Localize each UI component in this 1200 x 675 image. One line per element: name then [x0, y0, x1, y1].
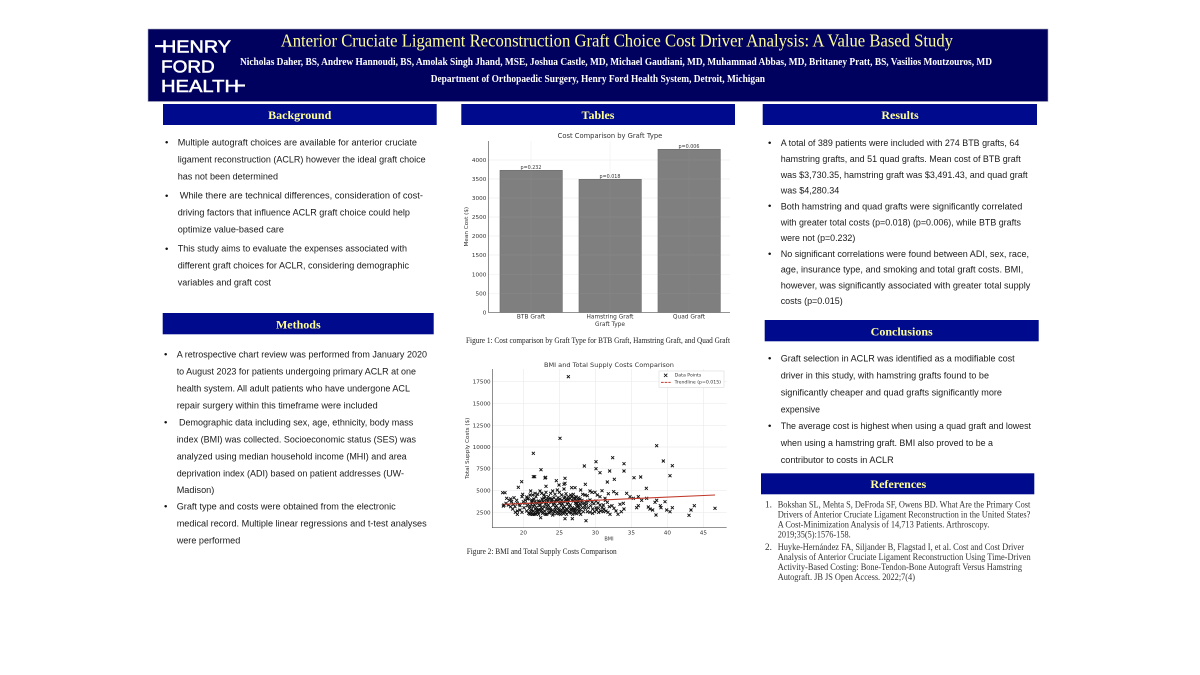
background bullet points: optimize value-based care: [178, 225, 284, 236]
panel: methods: [163, 313, 434, 547]
methods bullet points: analyzed using median household income (MHI) and area: [177, 451, 407, 462]
bar chart: cost comparison by graft type: [464, 132, 730, 328]
bar chart: cost comparison by graft type: 2000: [472, 234, 487, 240]
background bullet points: ligament reconstruction (ACLR) however the ideal graft choice: [178, 155, 426, 166]
results bullet points: was $4,280.34: [780, 186, 840, 197]
panel: results: [763, 104, 1037, 307]
methods bullet points: Madison): [177, 485, 214, 496]
logo: Henry Ford Health: FORD: [161, 56, 215, 76]
background bullet points: has not been determined: [178, 172, 278, 183]
bar chart: cost comparison by graft type: p=0.232: [521, 165, 541, 171]
heading: methods: Methods: [276, 317, 321, 331]
scatter plot: BMI and total supply costs: [465, 362, 727, 543]
results bullet points: •: [768, 138, 771, 149]
results bullet points: •: [768, 201, 771, 212]
conclusions bullet points: expensive: [781, 405, 820, 416]
conclusions bullet points: driver in this study, with hamstring grafts found to be: [781, 371, 989, 382]
results bullet points: A total of 389 patients were included with 274 BTB grafts, 64: [781, 138, 1020, 149]
results bullet points: with greater total costs (p=0.018) (p=0.006), while BTB grafts: [780, 217, 1021, 228]
scatter plot: BMI and total supply costs: 40: [664, 530, 671, 536]
scatter plot: BMI and total supply costs: BMI and Total Supply Costs Comparison: [544, 362, 674, 369]
methods bullet points: index (BMI) was collected. Socioeconomic status (SES) was: [177, 435, 416, 446]
results bullet points: Both hamstring and quad grafts were significantly correlated: [781, 201, 1022, 212]
bar chart: cost comparison by graft type: Cost Comparison by Graft Type: [558, 132, 662, 140]
reference list: A Cost-Minimization Analysis of 14,713 Patients. Arthroscopy.: [778, 520, 989, 530]
conclusions bullet points: Graft selection in ACLR was identified as a modifiable cost: [781, 353, 1015, 364]
results bullet points: •: [768, 249, 771, 260]
methods bullet points: Demographic data including sex, age, ethnicity, body mass: [179, 417, 413, 428]
scatter plot: BMI and total supply costs: 2500: [476, 510, 491, 516]
figure 1 caption: Figure 1: Cost comparison by Graft Type for BTB Graft, Hamstring Graft, and Quad Graft: [466, 336, 731, 345]
panel: references: [761, 473, 1034, 582]
heading: methods: [163, 313, 434, 334]
heading: background: [163, 104, 437, 125]
panel: tables: [461, 104, 735, 556]
heading: references: References: [870, 477, 927, 491]
department: Department of Orthopaedic Surgery, Henry Ford Health System, Detroit, Michigan: [431, 74, 765, 85]
conclusions bullet points: contributor to costs in ACLR: [781, 455, 894, 466]
reference list: Analysis of Anterior Cruciate Ligament Reconstruction Using Time-Driven: [778, 552, 1031, 562]
heading: background: Background: [268, 108, 332, 122]
background bullet points: different graft choices for ACLR, considering demographic: [178, 261, 409, 272]
panel: conclusions: [765, 320, 1039, 466]
scatter plot: BMI and total supply costs: 10000: [473, 445, 491, 451]
bar chart: cost comparison by graft type: 3500: [472, 177, 487, 183]
scatter plot: BMI and total supply costs: 35: [628, 530, 635, 536]
reference list: Activity-Based Costing: Bone-Tendon-Bone Autograft Versus Hamstring: [778, 562, 1022, 572]
reference list: 2.: [765, 542, 772, 552]
scatter plot: BMI and total supply costs: 15000: [473, 401, 491, 407]
figure 2 caption: Figure 2: BMI and Total Supply Costs Comparison: [467, 547, 617, 556]
background bullet points: •: [165, 244, 168, 255]
results bullet points: [768, 138, 1030, 307]
reference list: Bokshan SL, Mehta S, DeFroda SF, Owens BD. What Are the Primary Cost: [778, 500, 1031, 510]
heading: references: [761, 473, 1034, 494]
logo: Henry Ford Health: HEALTH: [161, 76, 239, 96]
results bullet points: costs (p=0.015): [781, 296, 843, 307]
scatter plot: BMI and total supply costs: 30: [592, 530, 599, 536]
background bullet points: [165, 138, 426, 289]
results bullet points: were not (p=0.232): [780, 233, 855, 244]
background bullet points: •: [165, 191, 168, 202]
reference list: 1.: [765, 500, 772, 510]
reference list: Huyke-Hernández FA, Siljander B, Flagstad I, et al. Cost and Cost Driver: [778, 542, 1024, 552]
background bullet points: Multiple autograft choices are available for anterior cruciate: [178, 138, 417, 149]
title: Anterior Cruciate Ligament Reconstruction Graft Choice Cost Driver Analysis: A Value Based Study: [281, 31, 953, 51]
methods bullet points: deprivation index (ADI) based on patient addresses (UW-: [177, 468, 404, 479]
panel: background: [163, 104, 437, 289]
reference list: Autograft. JB JS Open Access. 2022;7(4): [778, 572, 915, 582]
heading: results: Results: [881, 108, 919, 122]
conclusions bullet points: •: [768, 421, 771, 432]
logo: Henry Ford Health: HENRY: [162, 37, 231, 57]
bar chart: cost comparison by graft type: 500: [476, 291, 487, 297]
heading: tables: Tables: [582, 108, 615, 122]
bar chart: cost comparison by graft type: p=0.006: [679, 144, 699, 150]
bar chart: cost comparison by graft type: 4000: [472, 158, 487, 164]
results bullet points: was $3,730.35, hamstring graft was $3,491.43, and quad graft: [780, 170, 1028, 181]
scatter plot: BMI and total supply costs: BMI: [604, 537, 614, 543]
conclusions bullet points: when using a hamstring graft. BMI also proved to be a: [780, 438, 994, 449]
methods bullet points: •: [164, 417, 167, 428]
results bullet points: however, was significantly associated with greater total supply: [781, 280, 1030, 291]
logo: Henry Ford Health: [155, 37, 245, 96]
bar chart: cost comparison by graft type: 2500: [472, 215, 487, 221]
heading: conclusions: [765, 320, 1039, 341]
scatter plot: BMI and total supply costs: 5000: [476, 489, 491, 495]
scatter plot: BMI and total supply costs: 7500: [476, 467, 491, 473]
scatter plot: BMI and total supply costs: 12500: [473, 423, 491, 429]
bar chart: cost comparison by graft type: p=0.018: [600, 174, 620, 180]
bar chart: cost comparison by graft type: 1000: [472, 272, 487, 278]
heading: results: [763, 104, 1037, 125]
results bullet points: No significant correlations were found between ADI, sex, race,: [781, 249, 1029, 260]
methods bullet points: medical record. Multiple linear regressions and t-test analyses: [177, 519, 427, 530]
scatter plot: BMI and total supply costs: Total Supply Costs ($): [465, 418, 471, 480]
scatter plot: BMI and total supply costs: 45: [700, 530, 707, 536]
results bullet points: hamstring grafts, and 51 quad grafts. Mean cost of BTB graft: [781, 154, 1021, 165]
heading: tables: [461, 104, 735, 125]
methods bullet points: were performed: [176, 536, 240, 547]
background bullet points: variables and graft cost: [178, 278, 271, 289]
legend: Trendline (p=0.015): [674, 380, 721, 386]
bar chart: cost comparison by graft type: Mean Cost ($): [464, 207, 470, 246]
bar chart: cost comparison by graft type: Graft Type: [595, 322, 625, 328]
scatter plot: BMI and total supply costs: 25: [556, 530, 563, 536]
methods bullet points: •: [164, 501, 167, 512]
scatter plot: BMI and total supply costs: 20: [520, 530, 527, 536]
background bullet points: driving factors that influence ACLR graft choice could help: [178, 208, 410, 219]
reference list: Drivers of Anterior Cruciate Ligament Reconstruction in the United States?: [778, 510, 1030, 520]
conclusions bullet points: The average cost is highest when using a quad graft and lowest: [781, 421, 1031, 432]
authors: Nicholas Daher, BS, Andrew Hannoudi, BS, Amolak Singh Jhand, MSE, Joshua Castle, MD, Michael Gaudiani, MD, Muhammad Abbas, MD, Brittaney Pratt, BS, Vasilios Moutzouros, MD: [240, 57, 992, 68]
legend: Data Points: [675, 373, 702, 379]
reference list: 2019;35(5):1576-158.: [778, 529, 851, 539]
bar chart: cost comparison by graft type: Quad Graft: [673, 315, 706, 321]
methods bullet points: •: [164, 350, 167, 361]
bar chart: cost comparison by graft type: BTB Graft: [517, 315, 546, 321]
methods bullet points: health system. All adult patients who have undergone ACL: [177, 384, 411, 395]
legend: [659, 371, 724, 387]
methods bullet points: repair surgery within this timeframe were included: [177, 401, 378, 412]
reference list: [765, 500, 1031, 582]
conclusions bullet points: •: [768, 353, 771, 364]
background bullet points: This study aims to evaluate the expenses associated with: [178, 244, 407, 255]
scatter plot: BMI and total supply costs: 17500: [473, 380, 491, 386]
methods bullet points: [164, 350, 427, 547]
bar chart: cost comparison by graft type: 1500: [472, 253, 487, 259]
methods bullet points: Graft type and costs were obtained from the electronic: [177, 501, 396, 512]
background bullet points: While there are technical differences, consideration of cost-: [180, 191, 423, 202]
background bullet points: •: [165, 138, 168, 149]
bar chart: cost comparison by graft type: 3000: [472, 196, 487, 202]
conclusions bullet points: [768, 353, 1031, 466]
results bullet points: age, insurance type, and smoking and total graft costs. BMI,: [781, 265, 1023, 276]
header banner: [148, 29, 1048, 102]
methods bullet points: A retrospective chart review was performed from January 2020: [177, 350, 427, 361]
heading: conclusions: Conclusions: [871, 324, 933, 338]
bar chart: cost comparison by graft type: 0: [483, 310, 487, 316]
conclusions bullet points: significantly cheaper and quad grafts significantly more: [781, 388, 1002, 399]
methods bullet points: to August 2023 for patients undergoing primary ACLR at one: [177, 367, 416, 378]
bar chart: cost comparison by graft type: Hamstring Graft: [587, 315, 634, 321]
